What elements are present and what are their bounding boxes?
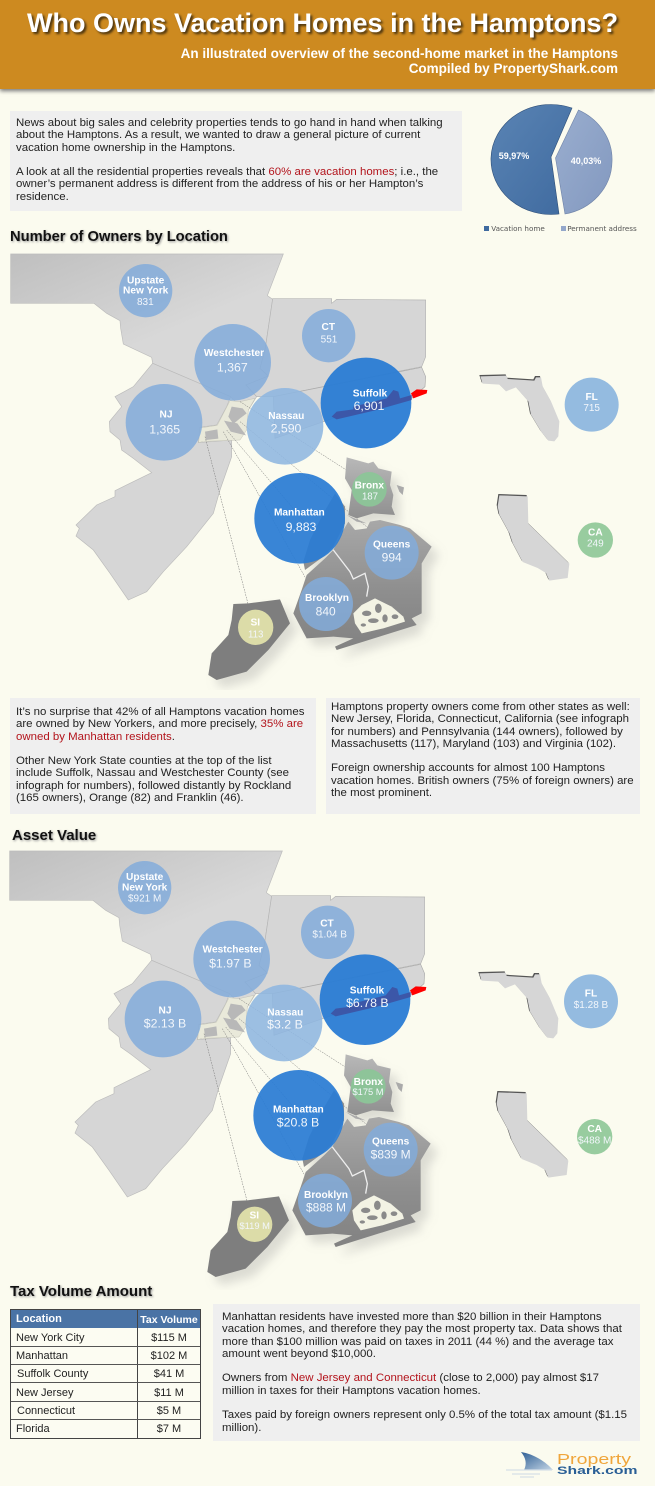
- text: tax explanation: Taxes paid by foreign owners represent only 0.5% of the total tax amount ($1.15: [222, 1409, 627, 1421]
- text: tax explanation: million).: [222, 1422, 261, 1434]
- bubble: Brooklyn: Brooklyn: [305, 593, 349, 604]
- bubble: Upstate New York: 831: [137, 297, 154, 308]
- panel: tax explanation: [213, 1304, 640, 1441]
- heading: asset value: Asset Value: [12, 827, 96, 844]
- bubble: Manhattan: Manhattan: [273, 1104, 324, 1115]
- text: tax explanation: more than $100 million was paid on taxes in 2011 (44 %) and the average tax: [222, 1336, 613, 1348]
- subtitle: An illustrated overview of the second-home market in the Hamptons: [181, 46, 618, 61]
- bubble: Queens: $839 M: [371, 1147, 411, 1161]
- bubble: SI: [238, 610, 273, 645]
- text: New York owners: [16, 706, 304, 804]
- table: tax volume: Suffolk County: [17, 1368, 88, 1380]
- bubble: FL: FL: [585, 989, 597, 1000]
- pie chart: vacation home vs permanent address: 40,03%: [571, 156, 601, 166]
- table: tax volume: $41 M: [154, 1368, 184, 1380]
- map: asset value: [9, 850, 618, 1287]
- header banner: [0, 0, 655, 89]
- bubble: CT: CT: [322, 322, 336, 333]
- bubble: Queens: [364, 1123, 418, 1177]
- text: other states and foreign owners: [331, 701, 634, 799]
- text: tax explanation: million in taxes for their Hamptons vacation homes.: [222, 1385, 481, 1397]
- icon: shark fin: [506, 1452, 553, 1478]
- text: tax explanation: Manhattan residents have invested more than $20 billion in their Hamptons: [222, 1311, 602, 1323]
- bubble: Bronx: [352, 472, 387, 507]
- bubble: SI: SI: [250, 1211, 259, 1222]
- text: New York owners: It’s no surprise that 42% of all Hamptons vacation homes: [16, 706, 304, 718]
- bubble: Suffolk: [321, 358, 427, 448]
- text: introduction: residence.: [16, 191, 69, 203]
- bubble: NJ: NJ: [159, 1006, 171, 1017]
- bubble: Nassau: [247, 388, 323, 465]
- bubble: Upstate New York: New York: [123, 286, 169, 297]
- bubble: Nassau: Nassau: [267, 1008, 303, 1019]
- bubble: FL: 715: [583, 403, 600, 414]
- bubble: Suffolk: $6.78 B: [346, 996, 389, 1010]
- bubble: Suffolk: Suffolk: [350, 985, 385, 996]
- text: New York owners: are owned by New Yorkers, and more precisely, 35% are: [16, 718, 303, 730]
- logo: PropertyShark.com: [506, 1452, 637, 1478]
- table: tax volume: New Jersey: [16, 1387, 73, 1399]
- table: tax volume: $7 M: [157, 1423, 181, 1435]
- heading: tax volume amount: Tax Volume Amount: [10, 1283, 152, 1300]
- table: tax volume: New York City: [16, 1332, 84, 1344]
- text: New York owners: include Suffolk, Nassau and Westchester County (see: [16, 767, 289, 779]
- bubble: Brooklyn: [299, 577, 353, 631]
- text: tax explanation: Owners from New Jersey and Connecticut (close to 2,000) pay almost $17: [222, 1372, 599, 1384]
- bubble: Manhattan: $20.8 B: [277, 1116, 319, 1130]
- pie chart: vacation home vs permanent address: Vacation home: [491, 224, 545, 233]
- bubble: CA: CA: [588, 528, 603, 539]
- bubble: CA: 249: [587, 539, 604, 550]
- text: other states and foreign owners: Hamptons property owners come from other states as well:: [331, 701, 630, 713]
- heading: number of owners: Number of Owners by Location: [10, 229, 228, 245]
- panel: New York owners: [10, 698, 316, 814]
- bubble: Queens: 994: [382, 551, 402, 565]
- bubble: CT: $1.04 B: [312, 930, 347, 941]
- text: New York owners: (165 owners), Orange (82) and Franklin (46).: [16, 792, 244, 804]
- logo: PropertyShark.com: Shark.com: [557, 1465, 637, 1477]
- bubble: Bronx: [351, 1069, 386, 1104]
- text: tax explanation: amount went beyond $10,000.: [222, 1348, 376, 1360]
- bubble: Westchester: $1.97 B: [209, 956, 252, 970]
- base map: [11, 254, 569, 680]
- logo: PropertyShark.com: Property: [557, 1452, 631, 1468]
- text: New York owners: infograph for numbers), followed distantly by Rockland: [16, 780, 291, 792]
- bubble: Nassau: $3.2 B: [267, 1018, 303, 1032]
- bubble: Westchester: [193, 921, 270, 997]
- bubble: FL: $1.28 B: [574, 1000, 609, 1011]
- bubble: NJ: $2.13 B: [144, 1017, 186, 1031]
- base map: [10, 851, 568, 1277]
- bubble: Westchester: Westchester: [204, 348, 264, 359]
- table: tax volume: $115 M: [151, 1332, 187, 1344]
- text: New York owners: owned by Manhattan residents.: [16, 731, 175, 743]
- text: introduction: owner’s permanent address is different from the address of his or her Hampton’s: [16, 178, 423, 190]
- bubble: Bronx: Bronx: [355, 480, 384, 491]
- text: tax explanation: vacation homes, and therefore they pay the most property tax. Data shows that: [222, 1323, 622, 1335]
- bubble: CA: [577, 1119, 612, 1154]
- text: introduction: News about big sales and celebrity properties tends to go hand in hand when talking: [16, 117, 443, 129]
- bubble: Bronx: Bronx: [354, 1077, 383, 1088]
- table: tax volume: Tax Volume: [140, 1314, 198, 1326]
- bubble: NJ: 1,365: [149, 422, 180, 436]
- text: introduction: about the Hamptons. As a result, we wanted to draw a general picture of current: [16, 129, 420, 141]
- bubble: Westchester: 1,367: [217, 361, 248, 375]
- bubble: CA: CA: [587, 1124, 603, 1135]
- table: tax volume: [10, 1309, 201, 1439]
- text: introduction: [16, 117, 443, 203]
- text: other states and foreign owners: New Jersey, Florida, Connecticut, California (see infograph: [331, 713, 629, 725]
- bubble: Suffolk: 6,901: [354, 399, 385, 413]
- bubble: SI: $119 M: [239, 1221, 270, 1231]
- text: other states and foreign owners: vacation homes. British owners (75% of foreign owners) are: [331, 775, 634, 787]
- bubble: SI: 113: [248, 629, 263, 640]
- bubble: Queens: Queens: [372, 1136, 410, 1147]
- subtitle: [181, 46, 618, 76]
- bubble: CA: [578, 522, 613, 558]
- text: other states and foreign owners: Massachusetts (117), Maryland (103) and Virginia (102).: [331, 738, 616, 750]
- bubble: Upstate New York: Upstate: [126, 872, 164, 883]
- bubble: NJ: NJ: [160, 409, 172, 420]
- bubble: NJ: [125, 981, 201, 1057]
- map: number of owners by location: [10, 254, 619, 690]
- bubble: Upstate New York: [118, 861, 171, 914]
- bubble: Nassau: [246, 985, 322, 1061]
- table: tax volume: Connecticut: [17, 1405, 75, 1417]
- panel: other states and foreign owners: [326, 698, 640, 814]
- bubble: Brooklyn: $888 M: [306, 1200, 346, 1214]
- panel: introduction: [10, 111, 462, 211]
- bubble: SI: [237, 1207, 272, 1242]
- bubble: Brooklyn: [298, 1174, 352, 1228]
- subtitle: Compiled by PropertyShark.com: [409, 61, 618, 76]
- bubble: Suffolk: [320, 954, 426, 1045]
- bubble: Suffolk: Suffolk: [353, 388, 388, 399]
- text: other states and foreign owners: Foreign ownership accounts for almost 100 Hamptons: [331, 762, 605, 774]
- text: introduction: vacation home ownership in the Hamptons.: [16, 142, 235, 154]
- bubble: CT: [301, 906, 354, 959]
- bubble: Brooklyn: 840: [316, 605, 336, 619]
- bubble: Upstate New York: $921 M: [128, 893, 161, 904]
- bubble: Queens: Queens: [373, 539, 411, 550]
- bubble: SI: SI: [251, 618, 260, 629]
- bubble: CT: [302, 309, 355, 362]
- bubble: Manhattan: [254, 473, 345, 564]
- bubble: CT: CT: [320, 919, 335, 930]
- bubble: Upstate New York: New York: [122, 883, 168, 894]
- bubble: NJ: [126, 384, 202, 461]
- text: other states and foreign owners: for numbers) and Pennsylvania (144 owners), followed by: [331, 726, 623, 738]
- table: tax volume: $102 M: [151, 1350, 187, 1362]
- bubble: Manhattan: [253, 1070, 344, 1161]
- table: tax volume: Florida: [16, 1423, 50, 1435]
- bubble: CT: 551: [321, 335, 338, 346]
- text: other states and foreign owners: the most prominent.: [331, 787, 432, 799]
- bubble: FL: FL: [585, 392, 598, 403]
- text: introduction: A look at all the residential properties reveals that 60% are vacation homes; i.e., the: [16, 166, 438, 178]
- text: tax explanation: [222, 1311, 627, 1434]
- bubble: CA: $488 M: [578, 1135, 611, 1146]
- bubble: Bronx: $175 M: [352, 1087, 384, 1097]
- pie chart: vacation home vs permanent address: [484, 104, 637, 233]
- bubble: Westchester: [194, 324, 271, 401]
- bubble: Manhattan: Manhattan: [274, 508, 325, 519]
- bubble: Bronx: 187: [362, 491, 378, 502]
- bubble: Nassau: Nassau: [268, 411, 304, 422]
- bubble: Queens: [365, 526, 419, 580]
- table: tax volume: $5 M: [157, 1405, 181, 1417]
- title: Who Owns Vacation Homes in the Hamptons?: [27, 8, 618, 38]
- table: tax volume: Location: [16, 1313, 62, 1325]
- pie chart: vacation home vs permanent address: 59,97%: [499, 151, 529, 161]
- bubble: FL: [565, 378, 619, 432]
- bubble: Manhattan: 9,883: [286, 520, 317, 534]
- bubble: Upstate New York: Upstate: [127, 275, 165, 286]
- bubble: Brooklyn: Brooklyn: [304, 1190, 348, 1201]
- bubble: Upstate New York: [119, 264, 172, 317]
- table: tax volume: $11 M: [154, 1387, 184, 1399]
- text: New York owners: Other New York State counties at the top of the list: [16, 755, 272, 767]
- pie chart: vacation home vs permanent address: Permanent address: [567, 224, 637, 233]
- bubble: FL: [564, 974, 618, 1028]
- bubble: Westchester: Westchester: [203, 945, 263, 956]
- bubble: Nassau: 2,590: [271, 421, 302, 435]
- table: tax volume: Manhattan: [16, 1350, 68, 1362]
